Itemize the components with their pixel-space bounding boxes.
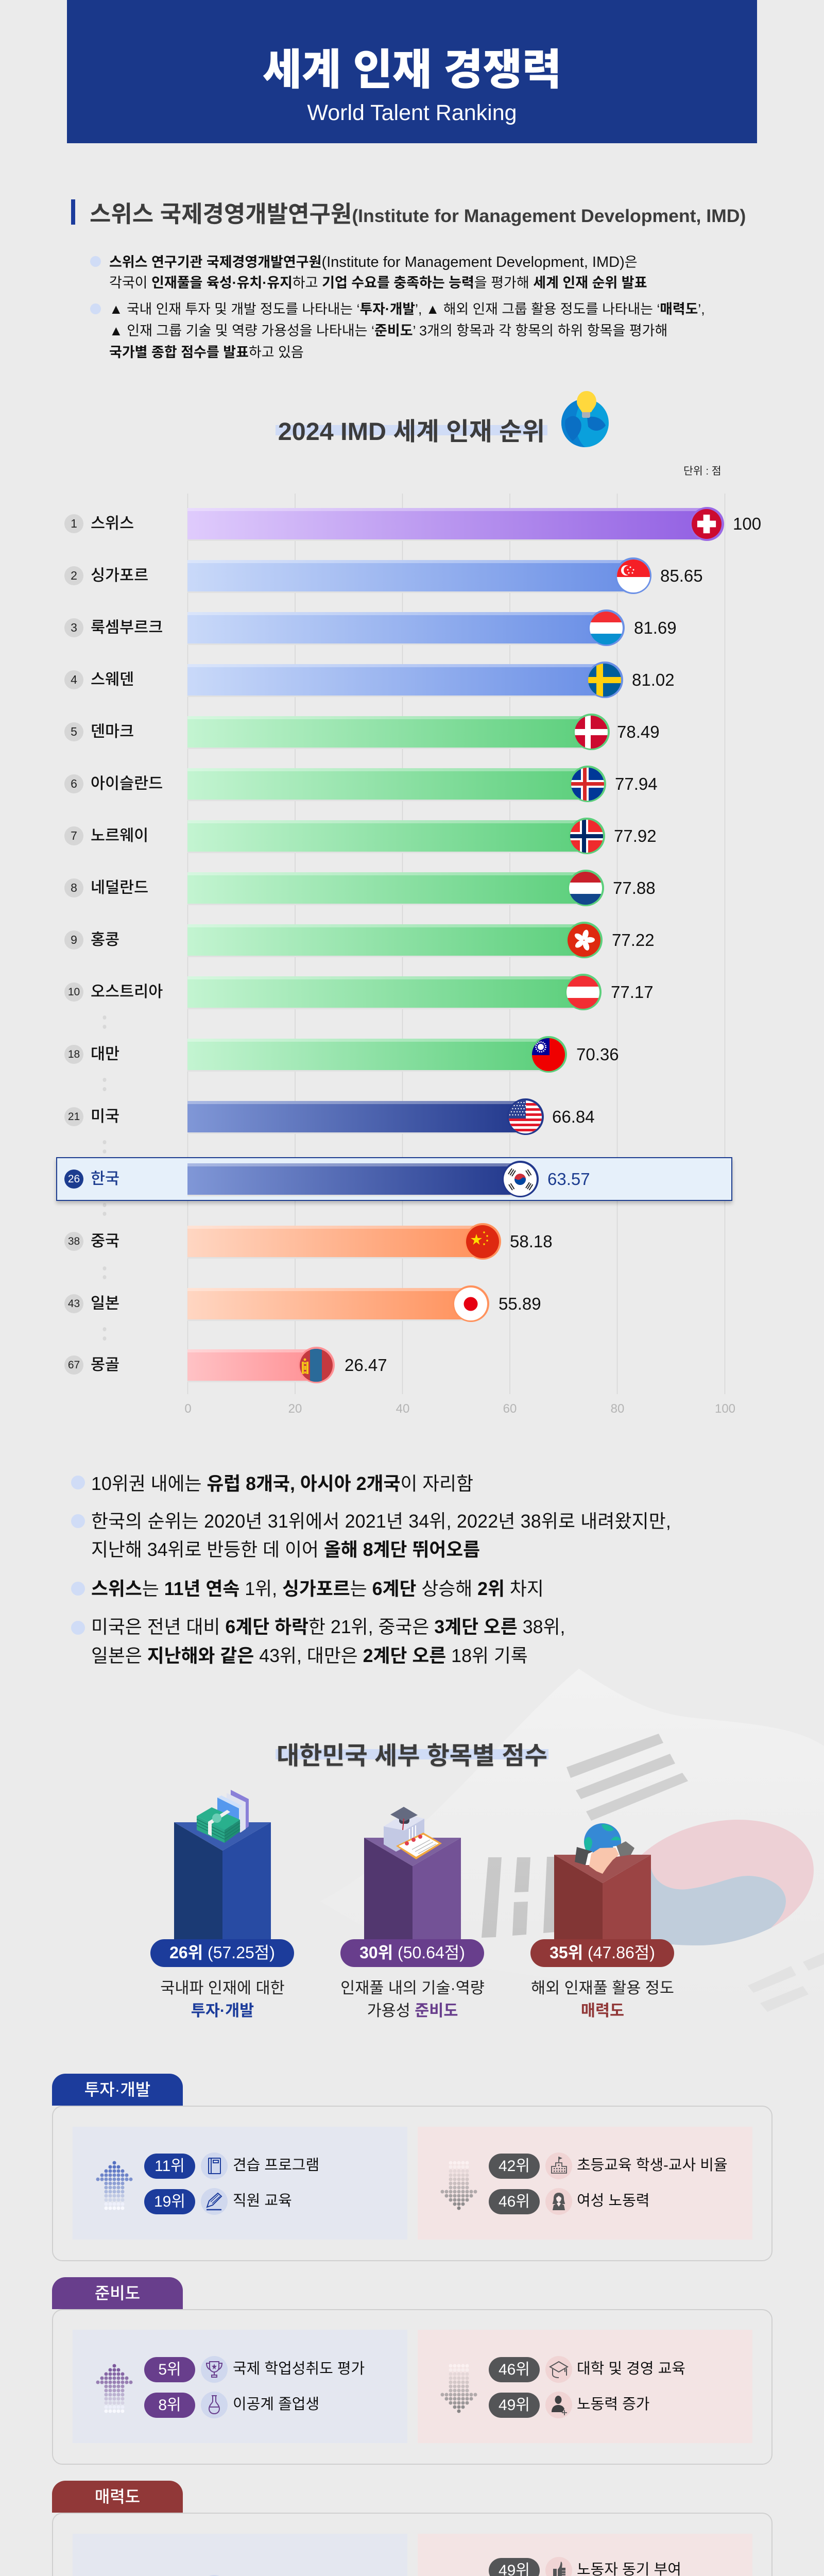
caption: 투자·개발 xyxy=(191,2002,254,2020)
header banner xyxy=(67,0,757,143)
pillar: investment and development xyxy=(150,1790,294,2020)
chart x axis labels: 80 xyxy=(611,1402,624,1416)
rank pill: 26위 (57.25점) xyxy=(169,1943,275,1962)
chart row: Japan: 일본 xyxy=(91,1295,119,1312)
chart x axis labels xyxy=(184,1402,735,1416)
chart row: Taiwan xyxy=(64,1036,619,1073)
icon: school xyxy=(545,2153,572,2179)
flag: Taiwan xyxy=(530,1036,566,1073)
icon: trophy xyxy=(201,2356,228,2383)
intro bullets: ▲ 국내 인재 투자 및 개발 정도를 나타내는 ‘투자·개발’, ▲ 해외 인재 그룹 활용 정도를 나타내는 ‘매력도’, xyxy=(109,301,705,317)
strong items xyxy=(73,2534,407,2576)
chart row: Hong Kong: 77.22 xyxy=(612,930,655,950)
chart row: Switzerland xyxy=(64,507,761,541)
panel: readiness: 8위 xyxy=(158,2397,181,2414)
flag: Norway xyxy=(569,818,605,854)
chart row: Mongolia: 몽골 xyxy=(91,1356,119,1374)
pillar: attractiveness xyxy=(530,1823,674,2020)
panel: investment and development: 11위 xyxy=(154,2158,185,2175)
analysis bullets: 미국은 전년 대비 6계단 하락한 21위, 중국은 3계단 오른 38위, xyxy=(91,1617,565,1637)
icon: person plus xyxy=(545,2392,572,2418)
chart row: Singapore xyxy=(64,557,703,594)
flag: Luxembourg xyxy=(588,609,624,646)
pillar graphic with building, cap and clipboard xyxy=(364,1807,461,1939)
chart row: Netherlands: 네덜란드 xyxy=(91,879,148,896)
chart row: China: 38 xyxy=(68,1235,80,1247)
icon: handshake xyxy=(201,2575,228,2576)
chart row: Iceland: 77.94 xyxy=(615,774,658,793)
chart row: Switzerland: 스위스 xyxy=(91,515,134,532)
flag: USA xyxy=(507,1098,544,1135)
panel: readiness xyxy=(52,2277,772,2465)
intro bullets: ▲ 인재 그룹 기술 및 역량 가용성을 나타내는 ‘준비도’ 3개의 항목과 각 항목의 하위 항목을 평가해 xyxy=(109,323,667,338)
flag: Austria xyxy=(564,974,602,1010)
chart row: Austria: 77.17 xyxy=(611,982,654,1002)
rank gap markers xyxy=(103,1015,106,1341)
rank pill xyxy=(340,1939,484,1967)
flag: Netherlands xyxy=(568,870,604,906)
down arrow xyxy=(440,2364,477,2413)
chart row: Sweden: 81.02 xyxy=(632,670,675,689)
analysis bullets: 일본은 지난해와 같은 43위, 대만은 2계단 오른 18위 기록 xyxy=(91,1646,528,1666)
icon: flask xyxy=(201,2392,228,2418)
chart row: Denmark xyxy=(64,714,660,750)
chart row: USA: 66.84 xyxy=(552,1107,595,1126)
analysis bullets: 10위권 내에는 유럽 8개국, 아시아 2개국이 자리함 xyxy=(91,1473,473,1494)
tab xyxy=(52,2277,183,2309)
caption: 가용성 준비도 xyxy=(367,2002,458,2020)
tab xyxy=(52,2074,183,2106)
rank pill xyxy=(150,1939,294,1967)
chart row: Denmark: 덴마크 xyxy=(91,723,134,740)
section heading: IMD: 스위스 국제경영개발연구원(Institute for Management Development, IMD) xyxy=(90,201,746,227)
panel: readiness: 5위 xyxy=(158,2361,181,2378)
panel: readiness: 국제 학업성취도 평가 xyxy=(233,2361,365,2377)
chart row: Mongolia xyxy=(64,1347,387,1383)
down arrow xyxy=(441,2161,477,2210)
panel: investment and development: 여성 노동력 xyxy=(577,2193,649,2209)
rank pill xyxy=(530,1939,674,1967)
panel: investment and development: 46위 xyxy=(499,2193,530,2210)
chart row: Japan xyxy=(64,1285,541,1322)
flag: Singapore xyxy=(615,557,651,594)
chart row: Netherlands: 8 xyxy=(71,881,77,894)
flag: Japan xyxy=(452,1285,489,1322)
tab: 투자·개발 xyxy=(84,2080,150,2099)
chart row: Mongolia: 26.47 xyxy=(345,1355,387,1375)
flag: Iceland xyxy=(570,766,606,802)
chart row: China: 중국 xyxy=(91,1232,119,1250)
main title: 세계 인재 경쟁력 xyxy=(263,46,561,94)
weak items xyxy=(418,2330,752,2443)
panel: investment and development xyxy=(52,2074,772,2261)
rank pill: 30위 (50.64점) xyxy=(359,1943,465,1962)
chart grid lines xyxy=(187,494,725,1394)
detail scores heading: 대한민국 세부 항목별 점수 xyxy=(277,1742,547,1770)
flag: Hong Kong xyxy=(565,922,603,958)
chart row: Iceland xyxy=(64,766,658,802)
flag: Sweden xyxy=(586,662,623,698)
chart row: USA xyxy=(64,1098,595,1135)
chart row: South Korea: 63.57 xyxy=(547,1170,590,1189)
strong items xyxy=(73,2330,407,2443)
analysis bullets xyxy=(71,1473,671,1666)
up arrow xyxy=(96,2364,133,2413)
chart row: Luxembourg: 81.69 xyxy=(634,618,677,637)
chart row: China xyxy=(64,1223,553,1260)
caption xyxy=(340,1979,485,2020)
chart row: Austria: 10 xyxy=(68,986,80,998)
panel: readiness: 노동력 증가 xyxy=(577,2396,649,2413)
chart row: Norway xyxy=(64,818,657,854)
flag: Denmark xyxy=(573,714,610,750)
pillar: readiness xyxy=(340,1807,485,2020)
chart row: Singapore: 싱가포르 xyxy=(91,567,148,584)
chart row: Taiwan: 70.36 xyxy=(576,1045,619,1064)
chart row: Netherlands xyxy=(64,870,656,906)
intro bullets: 국가별 종합 점수를 발표하고 있음 xyxy=(109,345,304,360)
caption: 해외 인재풀 활용 정도 xyxy=(531,1979,674,1997)
panel: investment and development: 42위 xyxy=(499,2158,530,2175)
unit label: 단위 : 점 xyxy=(683,465,722,477)
intro bullets xyxy=(90,254,705,360)
panel: investment and development: 19위 xyxy=(154,2193,185,2210)
flag: China xyxy=(465,1223,501,1260)
weak items xyxy=(418,2534,752,2576)
panel: attractiveness xyxy=(52,2481,772,2576)
icon: pencil xyxy=(201,2188,228,2215)
panel: investment and development: 초등교육 학생-교사 비율 xyxy=(577,2157,728,2174)
rank pill: 35위 (47.86점) xyxy=(550,1943,655,1962)
caption xyxy=(531,1979,674,2020)
panel: readiness: 이공계 졸업생 xyxy=(233,2396,319,2413)
icon: woman xyxy=(545,2188,572,2215)
chart x axis labels: 40 xyxy=(396,1402,409,1416)
chart row: Netherlands: 77.88 xyxy=(613,878,656,897)
chart row: Singapore: 85.65 xyxy=(660,566,703,585)
icon: thumbs up xyxy=(545,2557,572,2576)
chart row: Japan: 43 xyxy=(68,1298,80,1310)
up arrow xyxy=(96,2161,133,2210)
chart row: Hong Kong: 9 xyxy=(71,933,77,946)
chart x axis labels: 20 xyxy=(288,1402,302,1416)
analysis bullets: 스위스는 11년 연속 1위, 싱가포르는 6계단 상승해 2위 차지 xyxy=(91,1579,544,1599)
chart row: South Korea: 한국 xyxy=(91,1170,119,1188)
chart row: Mongolia: 67 xyxy=(68,1359,80,1371)
chart row: Iceland: 아이슬란드 xyxy=(91,775,163,792)
chart row: Japan: 55.89 xyxy=(499,1294,541,1313)
chart row: Hong Kong: 홍콩 xyxy=(91,931,119,948)
chart row: Luxembourg: 룩셈부르크 xyxy=(91,619,163,636)
caption: 매력도 xyxy=(581,2002,624,2020)
flag: Switzerland xyxy=(690,507,724,541)
chart row: Sweden xyxy=(64,662,675,698)
chart row: Norway: 7 xyxy=(71,829,77,842)
caption: 인재풀 내의 기술·역량 xyxy=(340,1979,485,1997)
caption: 국내파 인재에 대한 xyxy=(160,1979,285,1997)
chart x axis labels: 60 xyxy=(503,1402,517,1416)
chart row: Norway: 노르웨이 xyxy=(91,827,148,844)
chart row: Iceland: 6 xyxy=(71,777,77,790)
strong items xyxy=(73,2127,407,2240)
subtitle: World Talent Ranking xyxy=(307,100,517,125)
panel: investment and development: 직원 교육 xyxy=(233,2193,292,2209)
chart x axis labels: 100 xyxy=(715,1402,735,1416)
weak items xyxy=(418,2127,752,2240)
intro bullets: 각국이 인재풀을 육성·유치·유지하고 기업 수요를 충족하는 능력을 평가해 세계 인재 순위 발표 xyxy=(109,275,647,291)
chart row: Hong Kong xyxy=(64,922,655,958)
chart x axis labels: 0 xyxy=(184,1402,192,1416)
chart row: Norway: 77.92 xyxy=(614,826,657,845)
chart row: Taiwan: 18 xyxy=(68,1048,80,1060)
tab: 준비도 xyxy=(95,2284,140,2302)
chart row: Austria xyxy=(64,974,654,1010)
chart row: USA: 미국 xyxy=(91,1108,119,1125)
highlight box: Korea row xyxy=(56,1157,732,1201)
icon: graduation cap xyxy=(545,2356,572,2383)
icon: globe with light bulb xyxy=(561,391,609,447)
panel: readiness: 대학 및 경영 교육 xyxy=(577,2361,685,2377)
flag: South Korea xyxy=(502,1161,539,1197)
chart row: Austria: 오스트리아 xyxy=(91,983,163,1001)
background: faded Korean flag xyxy=(482,1734,824,2011)
analysis bullets: 지난해 34위로 반등한 데 이어 올해 8계단 뛰어오름 xyxy=(91,1539,480,1560)
chart row: Sweden: 4 xyxy=(71,673,77,686)
chart row: Switzerland: 1 xyxy=(71,517,77,530)
tab xyxy=(52,2481,183,2513)
chart row: Sweden: 스웨덴 xyxy=(91,671,134,688)
flag: Mongolia xyxy=(298,1347,335,1383)
analysis bullets: 한국의 순위는 2020년 31위에서 2021년 34위, 2022년 38위로 내려왔지만, xyxy=(91,1511,671,1532)
chart row: Singapore: 2 xyxy=(71,569,77,582)
pillar graphic with money and books xyxy=(174,1790,271,1939)
pillar graphic with globe and handshake xyxy=(554,1823,651,1939)
icon: book xyxy=(201,2153,228,2179)
chart row: South Korea: 26 xyxy=(68,1173,80,1185)
chart row: USA: 21 xyxy=(68,1111,80,1123)
chart row: Luxembourg: 3 xyxy=(71,621,77,634)
tab: 매력도 xyxy=(95,2487,140,2506)
chart heading: 2024 IMD 세계 인재 순위 xyxy=(278,418,545,446)
chart row: Denmark: 78.49 xyxy=(617,722,660,741)
chart row: Taiwan: 대만 xyxy=(91,1045,119,1063)
chart row: South Korea xyxy=(64,1161,590,1197)
chart row: China: 58.18 xyxy=(510,1232,553,1251)
panel: readiness: 46위 xyxy=(499,2361,530,2378)
chart row: Denmark: 5 xyxy=(71,725,77,738)
chart row: Luxembourg xyxy=(64,609,677,646)
panel: readiness: 49위 xyxy=(499,2397,530,2414)
caption xyxy=(160,1979,285,2020)
text: 100 xyxy=(733,514,761,533)
panel: investment and development: 견습 프로그램 xyxy=(233,2157,319,2174)
intro bullets: 스위스 연구기관 국제경영개발연구원(Institute for Management Development, IMD)은 xyxy=(109,254,638,270)
